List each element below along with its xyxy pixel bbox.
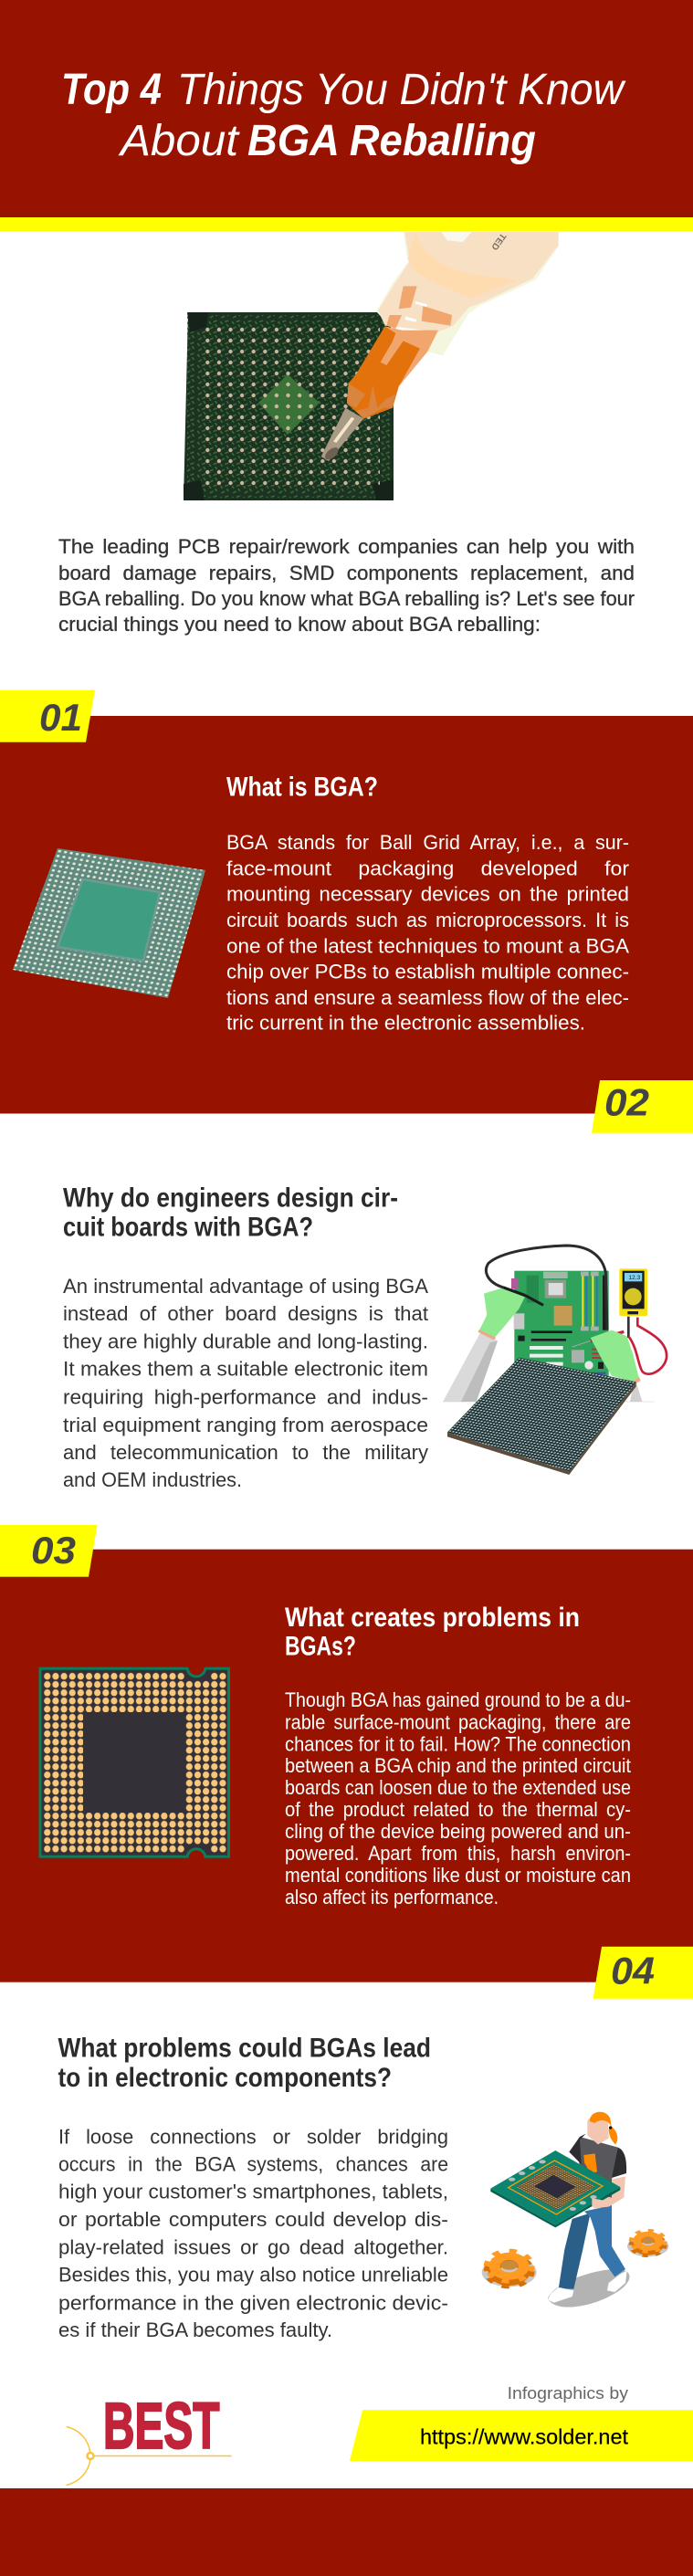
body text 02: trial equipment ranging from aerospace: [63, 1414, 428, 1436]
black probe wire: [486, 1246, 607, 1330]
illustration: BGA chip tilted: [13, 848, 205, 998]
right gear: [627, 2231, 668, 2256]
badge 02: [592, 1080, 693, 1133]
body text 01: circuit boards such as microprocessors. It is: [226, 909, 629, 931]
badge 04: 04: [611, 1950, 655, 1992]
multimeter: 12.3: [628, 1275, 641, 1281]
badge 03: [0, 1525, 97, 1577]
badge 01: [0, 690, 95, 742]
left gear: [482, 2251, 537, 2287]
heading 04: What problems could BGAs lead: [58, 2034, 431, 2064]
heading 02: [63, 1183, 398, 1242]
body text 02: It makes them a suitable electronic item: [63, 1358, 428, 1381]
heading 03: BGAs?: [285, 1631, 356, 1661]
right glove: [591, 1330, 642, 1402]
logo: BEST: BEST: [103, 2391, 219, 2463]
body text 04: Besides this, you may also notice unreliable: [58, 2263, 448, 2287]
chip board: [490, 2150, 620, 2227]
body text 02: they are highly durable and long-lasting.: [63, 1330, 428, 1353]
heading 03: [285, 1603, 580, 1661]
hero image: PCB with flux syringe: [184, 231, 559, 500]
body text 04: [58, 2126, 448, 2341]
body text 01: chip over PCBs to establish multiple connec-: [226, 961, 629, 983]
title: BGA Reballing: [247, 117, 536, 165]
intro paragraph: board damage repairs, SMD components replacement, and: [58, 562, 635, 584]
body text 03: powered. Apart from this, harsh environ-: [285, 1842, 631, 1865]
title: Things You Didn't Know: [177, 66, 626, 114]
body text 01: one of the latest techniques to mount a BGA: [226, 934, 629, 957]
body text 01: tric current in the electronic assemblies.: [226, 1012, 585, 1035]
body text 01: tions and ensure a seamless flow of the elec-: [226, 986, 629, 1009]
body text 02: and telecommunication to the military: [63, 1441, 428, 1464]
syringe: TED: [488, 231, 508, 252]
body text 02: requiring high-performance and indus-: [63, 1385, 428, 1408]
body text 03: of the product related to the thermal cy-: [285, 1798, 631, 1821]
intro paragraph: crucial things you need to know about BGA reballing:: [58, 613, 541, 636]
motherboard: [511, 1271, 609, 1393]
logo: BEST: [67, 2391, 232, 2486]
syringe: [321, 231, 559, 462]
body text 01: face-mount packaging developed for: [226, 857, 629, 879]
badge 04: [593, 1947, 693, 1999]
left arm and glove: [443, 1288, 525, 1402]
panel 03: What creates problems in BGAs: [0, 1525, 693, 1999]
body text 03: rable surface-mount packaging, there are: [285, 1710, 631, 1733]
pcb: [184, 312, 394, 500]
body text 03: chances for it to fail. How? The connection: [285, 1732, 631, 1755]
body text 04: es if their BGA becomes faulty.: [58, 2318, 332, 2341]
body text 02: [63, 1275, 428, 1491]
body text 03: [285, 1688, 631, 1908]
badge 03: 03: [31, 1529, 76, 1572]
title: About: [118, 117, 240, 165]
person: [548, 2112, 629, 2308]
footer band: [0, 2488, 693, 2576]
red probe wire: [572, 1317, 667, 1374]
title: [61, 66, 626, 165]
heading 04: [58, 2034, 431, 2093]
body text 03: Though BGA has gained ground to be a du-: [285, 1688, 631, 1711]
large BGA chip: [447, 1358, 636, 1475]
heading 03: What creates problems in: [285, 1603, 580, 1633]
intro paragraph: BGA reballing. Do you know what BGA reballing is? Let's see four: [58, 587, 635, 610]
heading 02: Why do engineers design cir-: [63, 1183, 398, 1214]
url bar: [350, 2410, 693, 2461]
body text 03: cling of the device being powered and un-: [285, 1820, 631, 1843]
heading 02: cuit boards with BGA?: [63, 1212, 313, 1242]
illustration: person carrying chip with gears: [482, 2112, 668, 2308]
url bar: https://www.solder.net: [420, 2424, 629, 2448]
body text 01: mounting necessary devices on the printed: [226, 883, 629, 906]
body text 01: [226, 831, 629, 1035]
badge 01: 01: [39, 696, 82, 739]
illustration: flat BGA chip: [40, 1666, 228, 1859]
body text 03: between a BGA chip and the printed circuit: [285, 1754, 631, 1777]
body text 03: mental conditions like dust or moisture can: [285, 1864, 631, 1887]
body text 02: instead of other board designs is that: [63, 1302, 428, 1325]
body text 03: also affect its performance.: [285, 1886, 499, 1908]
header banner: [0, 0, 693, 231]
badge 02: 02: [604, 1081, 649, 1124]
panel 02: Why engineers design with BGA: [63, 1183, 667, 1491]
body text 04: high your customer's smartphones, tablets,: [58, 2181, 448, 2203]
illustration: technician testing motherboard and BGA chip: [443, 1246, 667, 1475]
body text 02: and OEM industries.: [63, 1468, 242, 1491]
body text 03: boards can loosen due to the extended use: [285, 1776, 631, 1799]
multimeter: [619, 1268, 647, 1316]
panel 04: What problems could BGAs lead to: [58, 2034, 668, 2341]
body text 04: play-related issues or go dead altogether.: [58, 2236, 448, 2259]
body text 04: or portable computers could develop dis-: [58, 2208, 448, 2231]
body text 04: occurs in the BGA systems, chances are: [58, 2153, 448, 2175]
intro paragraph: The leading PCB repair/rework companies can help you with: [58, 535, 635, 558]
heading: What is BGA?: What is BGA?: [226, 773, 378, 803]
credit: infographics by: Infographics by: [508, 2383, 629, 2403]
heading 04: to in electronic components?: [58, 2063, 392, 2093]
panel 01: What is BGA: [0, 690, 693, 1133]
title: Top 4: [61, 66, 162, 114]
body text 02: An instrumental advantage of using BGA: [63, 1275, 428, 1298]
body text 01: BGA stands for Ball Grid Array, i.e., a sur-: [226, 831, 629, 854]
intro paragraph: [58, 535, 635, 636]
body text 04: performance in the given electronic devic-: [58, 2291, 448, 2314]
body text 04: If loose connections or solder bridging: [58, 2126, 448, 2149]
